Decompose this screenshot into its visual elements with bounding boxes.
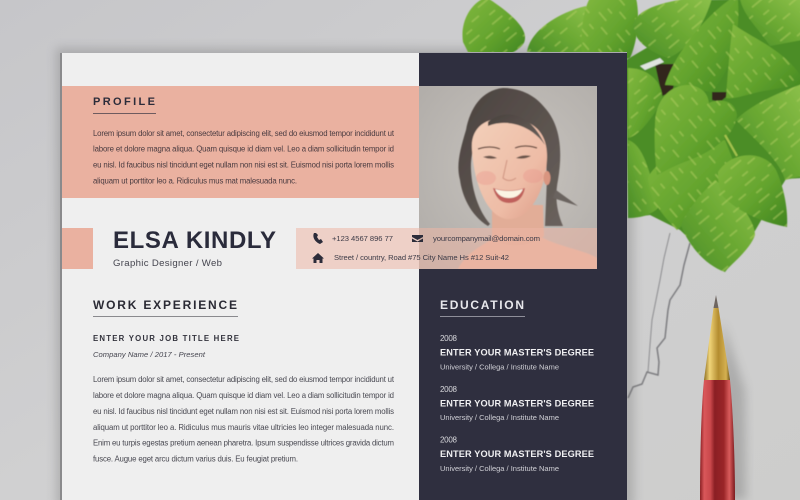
job description: aliquam ut porttitor leo a. Ridiculus mus mauris vitae ultricies leo integer malesuada nunc. bbox=[93, 423, 394, 432]
job description: eu nisl. Id faucibus nisl tincidunt eget nullam non nisi est sit. Euismod nisi porta lorem mollis bbox=[93, 407, 394, 416]
address: Street / country, Road #75 City Name Hs #12 Suit-42 bbox=[334, 253, 509, 262]
education entry 3: 2008 bbox=[440, 436, 458, 444]
portrait photo bbox=[419, 86, 597, 269]
job description: Lorem ipsum dolor sit amet, consectetur adipiscing elit, sed do eiusmod tempor incididunt ut bbox=[93, 375, 395, 384]
job description: Enim eu turpis egestas pretium aenean pharetra. Ipsum suspendisse ultrices gravida dictum bbox=[93, 438, 394, 448]
name: ELSA KINDLY bbox=[113, 227, 276, 254]
profile text: aliquam ut porttitor leo a. Ridiculus mus mat malesuada nunc. bbox=[93, 176, 297, 185]
contact band bbox=[296, 228, 597, 269]
education entry 3: University / Collega / Institute Name bbox=[440, 464, 559, 473]
profile text: Lorem ipsum dolor sit amet, consectetur adipiscing elit, sed do eiusmod tempor incididunt ut bbox=[93, 129, 395, 138]
icon: envelope bbox=[412, 235, 423, 242]
job description bbox=[93, 375, 395, 464]
profile text: eu nisl. Id faucibus nisl tincidunt eget nullam non nisi est sit. Euismod nisi porta lorem mollis bbox=[93, 160, 394, 170]
education entry 1: 2008 bbox=[440, 334, 458, 343]
education section bbox=[440, 298, 594, 473]
job role: Graphic Designer / Web bbox=[113, 258, 222, 269]
education entry 1: University / Collega / Institute Name bbox=[440, 362, 559, 372]
education entry 2: ENTER YOUR MASTER'S DEGREE bbox=[440, 398, 594, 408]
work experience heading: WORK EXPERIENCE bbox=[93, 298, 237, 312]
plant leaves behind the page bbox=[462, 0, 638, 66]
education entry 2: University / Collega / Institute Name bbox=[440, 413, 559, 422]
profile panel bbox=[62, 86, 419, 198]
paper shadow bbox=[56, 48, 634, 500]
education entry 2 bbox=[440, 385, 594, 422]
education heading: EDUCATION bbox=[440, 298, 524, 312]
profile heading: PROFILE bbox=[93, 96, 155, 108]
job title: ENTER YOUR JOB TITLE HERE bbox=[93, 334, 239, 343]
profile text: labore et dolore magna aliqua. Quam quisque id diam vel. Leo a diam sollicitudin tempor id bbox=[93, 145, 394, 154]
left column bbox=[62, 53, 419, 500]
icon: phone bbox=[313, 233, 323, 244]
education entry 1 bbox=[440, 334, 594, 372]
work experience section bbox=[93, 298, 395, 464]
resume page bbox=[60, 52, 627, 500]
icon: home bbox=[312, 253, 324, 263]
education entry 1: ENTER YOUR MASTER'S DEGREE bbox=[440, 348, 594, 358]
job description: labore et dolore magna aliqua. Quam quisque id diam vel. Leo a diam sollicitudin tempor id bbox=[93, 391, 394, 400]
profile text bbox=[93, 129, 395, 185]
red pen bbox=[700, 295, 746, 500]
phone number: +123 4567 896 77 bbox=[332, 234, 393, 243]
right column bbox=[419, 53, 627, 500]
email address: yourcompanymail@domain.com bbox=[433, 234, 540, 243]
job description: fusce. Augue eget arcu dictum varius duis. Eu feugiat pretium. bbox=[93, 454, 298, 464]
company line: Company Name / 2017 - Present bbox=[93, 350, 206, 359]
left accent tab bbox=[62, 228, 93, 269]
plant leaves beside the page bbox=[626, 0, 800, 272]
education entry 2: 2008 bbox=[440, 385, 458, 394]
education entry 3 bbox=[440, 436, 594, 473]
profile heading bbox=[93, 96, 156, 114]
education entry 3: ENTER YOUR MASTER'S DEGREE bbox=[440, 449, 594, 459]
